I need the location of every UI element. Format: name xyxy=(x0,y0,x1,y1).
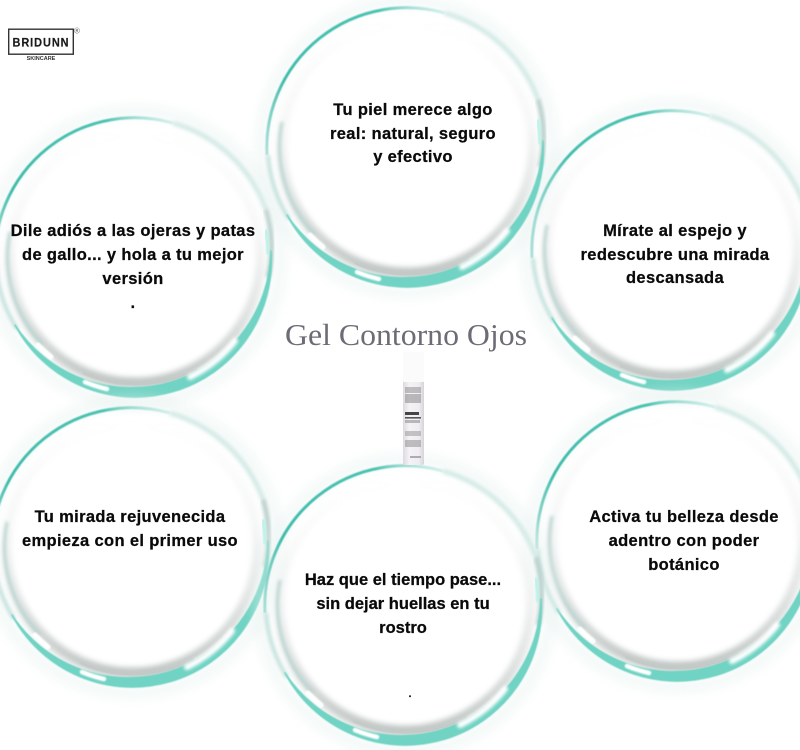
text: left circle message: versión xyxy=(102,270,164,288)
text: bottom-right circle message: adentro con poder xyxy=(609,532,760,550)
text: right circle message: Mírate al espejo y xyxy=(603,222,747,240)
text: bottom-center circle message: sin dejar huellas en tu xyxy=(316,595,490,613)
text: top circle message: Tu piel merece algo xyxy=(333,101,493,119)
logo: Bridunn skincare xyxy=(9,26,80,62)
text: top circle message: y efectivo xyxy=(373,148,453,166)
logo: Bridunn skincare: ® xyxy=(74,26,80,36)
text: left circle message: . xyxy=(131,294,135,312)
text: bottom-center circle message: rostro xyxy=(379,619,427,637)
product: gel bottle xyxy=(403,352,424,465)
logo: Bridunn skincare: SKINCARE xyxy=(27,56,56,62)
text: bottom-left circle message: empieza con el primer uso xyxy=(22,532,238,550)
text: bottom-right circle message: Activa tu belleza desde xyxy=(589,508,779,526)
panel: left circle xyxy=(0,111,281,403)
text: bottom-center circle message: Haz que el tiempo pase... xyxy=(305,571,501,589)
panel: right circle xyxy=(526,104,800,396)
text: left circle message: de gallo... y hola a tu mejor xyxy=(22,246,244,264)
text: right circle message: descansada xyxy=(626,269,724,287)
text: top circle message: real: natural, seguro xyxy=(330,125,496,143)
panel: top circle xyxy=(261,1,553,293)
text: bottom-center circle message: . xyxy=(409,689,412,700)
panel: bottom-right circle xyxy=(531,395,800,687)
panel: bottom-center circle xyxy=(259,459,551,750)
text: right circle message: redescubre una mirada xyxy=(581,246,770,264)
title: Gel Contorno Ojos xyxy=(285,317,527,352)
text: left circle message: Dile adiós a las ojeras y patas xyxy=(11,222,255,240)
panel: bottom-left circle xyxy=(0,401,278,693)
text: bottom-right circle message: botánico xyxy=(648,556,720,574)
logo: Bridunn skincare: BRIDUNN xyxy=(12,38,70,50)
text: bottom-left circle message: Tu mirada rejuvenecida xyxy=(35,508,226,526)
